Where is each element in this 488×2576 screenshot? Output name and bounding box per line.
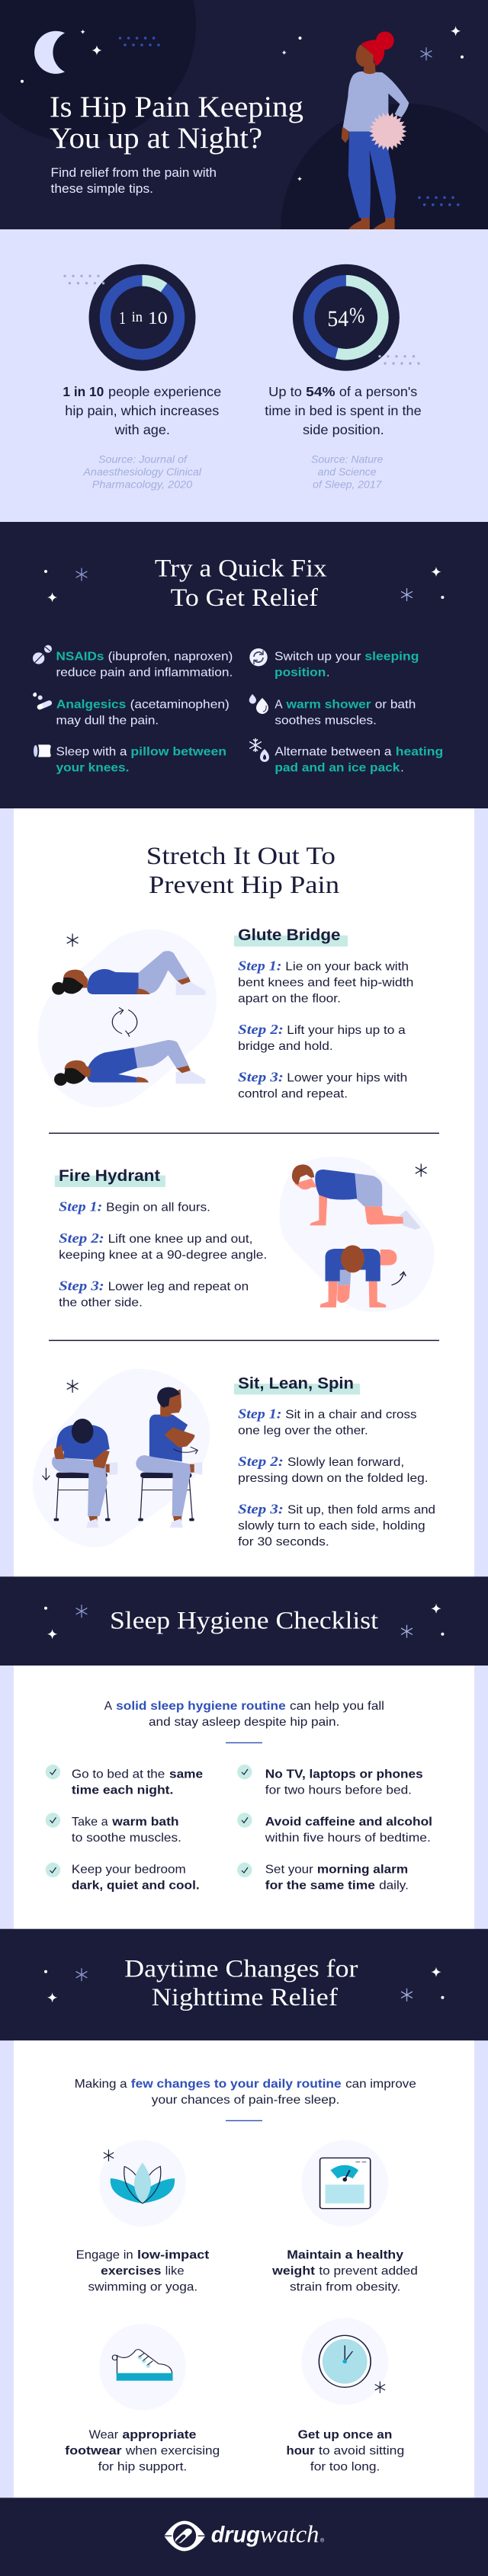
logo: wordmark: ® (320, 2538, 325, 2544)
item: sleep position: . (326, 667, 329, 680)
logo: wordmark: drug (211, 2523, 260, 2548)
item: warm shower (274, 698, 416, 727)
tip: footwear: footwear (65, 2445, 122, 2458)
text: 1 in 10 stat (63, 384, 221, 437)
illustration: sit lean spin (33, 1369, 210, 1547)
item: sleep position (274, 651, 419, 680)
panel: statistics (0, 229, 488, 522)
title: Is Hip Pain Keeping (50, 91, 303, 123)
panel: sleep hygiene checklist banner (0, 1576, 488, 1666)
tip: healthy weight: strain from obesity. (290, 2280, 400, 2293)
text: glute bridge: Lower your hips with (287, 1072, 407, 1085)
illustration: woman holding hip (342, 31, 409, 229)
tip: healthy weight: Maintain a healthy (287, 2248, 403, 2261)
text: glute bridge: bent knees and feet hip-width (238, 976, 413, 989)
figure: leaning forward (52, 1419, 117, 1528)
heading (146, 843, 339, 899)
text: 1 in 10 stat: hip pain, which increases (65, 403, 220, 418)
item: heat and ice: heating (396, 746, 443, 759)
item: pillow: pillow between (130, 746, 226, 759)
item: pillow: your knees. (56, 762, 129, 775)
tip: footwear: when exercising (125, 2445, 220, 2458)
icon: analgesic capsules (33, 693, 50, 707)
item: heat and ice: Alternate between a (274, 746, 392, 759)
item: heat and ice: . (400, 762, 404, 775)
icon: clock (302, 2318, 388, 2405)
icon: sleep switch (249, 648, 268, 666)
source: right (311, 453, 383, 491)
intro text: A (104, 1700, 112, 1713)
icon: NSAID pills (33, 645, 52, 664)
intro text: few changes to your daily routine (131, 2078, 342, 2091)
item: morning alarm (265, 1863, 409, 1892)
item: analgesics (56, 698, 230, 727)
chart: 54% donut: % (349, 303, 364, 328)
arrows: repeat (112, 1007, 137, 1037)
heading: Prevent Hip Pain (149, 872, 339, 899)
text: sit lean spin: pressing down on the folded leg. (238, 1472, 429, 1485)
arrow: down (43, 1468, 50, 1480)
heading highlight (55, 1176, 165, 1187)
item: same time (72, 1768, 203, 1797)
source: right: and Science (318, 466, 377, 478)
text: fire hydrant: the other side. (59, 1296, 143, 1309)
tip: low-impact exercise: low-impact (137, 2248, 210, 2261)
heading (155, 555, 327, 612)
chart: 1 in 10 donut: 1 (119, 309, 126, 328)
tip: low-impact exercise: exercises (101, 2264, 162, 2277)
item: morning alarm: morning alarm (317, 1863, 408, 1876)
text: fire hydrant: Step 2: (59, 1230, 104, 1246)
text: sit lean spin: Step 3: (238, 1502, 284, 1517)
tip: get up hourly: for too long. (310, 2461, 380, 2474)
text: glute bridge: Lie on your back with (285, 960, 409, 973)
icon: water drops (249, 694, 268, 714)
tip: footwear: for hip support. (98, 2461, 187, 2474)
subtitle: Find relief from the pain with (50, 165, 217, 180)
item: heat and ice (274, 746, 443, 775)
figure: spinning (136, 1387, 202, 1528)
source: left: Anaesthesiology Clinical (82, 466, 202, 478)
subtitle: these simple tips. (50, 181, 153, 196)
item: warm bath: to soothe muscles. (72, 1832, 181, 1845)
text: 54% stat: of a person's (339, 384, 418, 399)
icon: scale (302, 2140, 388, 2226)
text: sit lean spin (234, 1374, 435, 1548)
item: bedroom: dark, quiet and cool. (72, 1879, 200, 1892)
text: 54% stat: 54% (306, 384, 336, 399)
title: You up at Night? (50, 122, 262, 155)
dot pattern (63, 275, 104, 284)
item: caffeine: within five hours of bedtime. (265, 1832, 431, 1845)
intro text: and stay asleep despite hip pain. (149, 1716, 339, 1729)
source: right: Source: Nature (311, 453, 383, 465)
intro text (104, 1700, 384, 1729)
logo: wordmark: watch (260, 2520, 319, 2548)
text: 54% stat: side position. (303, 422, 384, 437)
intro text: solid sleep hygiene routine (116, 1700, 286, 1713)
text: glute bridge: control and repeat. (238, 1088, 348, 1101)
item: sleep position: Switch up your (274, 651, 361, 664)
item: no screens (265, 1768, 423, 1797)
subtitle (50, 165, 217, 196)
tip: low-impact exercise: like (165, 2264, 185, 2277)
text: 1 in 10 stat: 1 in 10 (63, 384, 104, 399)
item: warm shower: soothes muscles. (274, 714, 377, 727)
text: sit lean spin: slowly turn to each side, holding (238, 1520, 425, 1533)
heading: Stretch It Out To (146, 843, 336, 870)
panel: hero (0, 0, 488, 229)
panel: daytime tips (0, 2040, 488, 2498)
text: 1 in 10 stat: people experience (108, 384, 221, 399)
tip: low-impact exercise: swimming or yoga. (88, 2280, 197, 2293)
dot pattern (378, 355, 420, 365)
item: NSAIDs: (ibuprofen, naproxen) (108, 651, 233, 664)
illustration: fire hydrant (280, 1157, 434, 1312)
text: 54% stat (265, 384, 422, 437)
text: fire hydrant: Step 1: (59, 1198, 102, 1214)
tip: get up hourly: Get up once an (298, 2429, 392, 2442)
item: analgesics: (acetaminophen) (130, 698, 230, 711)
text: glute bridge: bridge and hold. (238, 1040, 333, 1053)
text: fire hydrant: Step 3: (59, 1278, 104, 1294)
panel: checklist (0, 1666, 488, 1929)
item: morning alarm: Set your (265, 1863, 313, 1876)
tip: low-impact exercise (76, 2248, 210, 2293)
night sky stars (21, 26, 464, 181)
text: glute bridge: Step 3: (238, 1070, 284, 1085)
text: glute bridge: apart on the floor. (238, 992, 341, 1005)
intro text: can help you fall (290, 1700, 384, 1713)
stars (44, 1604, 444, 1639)
heading: Sleep Hygiene Checklist (110, 1607, 378, 1634)
stars (44, 1967, 444, 2002)
source: left (82, 453, 202, 491)
item: bedroom: Keep your bedroom (72, 1863, 186, 1876)
item: morning alarm: for the same time (265, 1879, 375, 1892)
item: warm shower: or bath (375, 698, 416, 711)
illustration: glute bridge (38, 930, 217, 1107)
icon: shoe (99, 2324, 186, 2410)
chart: 54% donut (293, 264, 400, 371)
chart: 1 in 10 donut: 10 (148, 309, 168, 328)
item: same time: same (169, 1768, 203, 1781)
tip: get up hourly: hour (287, 2445, 315, 2458)
text: 54% stat: time in bed is spent in the (265, 403, 422, 418)
icon: snowflake and flame (249, 738, 269, 762)
item: bedroom (72, 1863, 200, 1892)
text: sit lean spin: Sit, Lean, Spin (238, 1374, 354, 1392)
pain burst (369, 112, 406, 151)
item: analgesics: Analgesics (56, 698, 126, 711)
check icons (46, 1765, 252, 1877)
chart: 1 in 10 donut: in (132, 309, 143, 325)
chart: 1 in 10 donut (88, 264, 195, 371)
item: no screens: for two hours before bed. (265, 1784, 412, 1797)
tip: healthy weight: weight (271, 2264, 316, 2277)
tip: footwear: Wear (89, 2429, 119, 2442)
tip: healthy weight (271, 2248, 418, 2293)
item: warm bath: Take a (72, 1816, 108, 1829)
stars (44, 567, 444, 602)
text: sit lean spin: Step 2: (238, 1454, 284, 1469)
text: 1 in 10 stat: with age. (114, 422, 170, 437)
text: glute bridge: Lift your hips up to a (287, 1024, 406, 1037)
item: pillow (56, 746, 226, 775)
item: caffeine (265, 1816, 432, 1845)
item: pillow: Sleep with a (56, 746, 127, 759)
item: no screens: No TV, laptops or phones (265, 1768, 423, 1781)
arrow: twist (173, 1447, 197, 1454)
text: sit lean spin: Step 1: (238, 1406, 281, 1421)
intro text: your chances of pain-free sleep. (152, 2094, 339, 2107)
panel: stretches (0, 808, 488, 1577)
item: warm shower: A (274, 698, 283, 711)
dot pattern (119, 37, 460, 206)
text: fire hydrant: Lift one knee up and out, (108, 1233, 252, 1246)
item: sleep position: sleeping (364, 651, 419, 664)
source: left: Pharmacology, 2020 (92, 479, 193, 491)
text: glute bridge: Step 2: (238, 1022, 284, 1037)
text: sit lean spin: Sit in a chair and cross (285, 1408, 416, 1421)
panel: daytime changes banner (0, 1929, 488, 2040)
text: fire hydrant (55, 1166, 267, 1309)
text: fire hydrant: keeping knee at a 90-degree angle. (59, 1249, 267, 1262)
text: sit lean spin: Sit up, then fold arms and (287, 1504, 435, 1517)
chart: 54% donut: 54 (327, 306, 348, 331)
heading highlight (234, 936, 348, 946)
item: warm shower: warm shower (285, 698, 371, 711)
source: left: Source: Journal of (98, 453, 188, 465)
heading: Daytime Changes for (124, 1955, 358, 1982)
text: 54% stat: Up to (268, 384, 302, 399)
heading: To Get Relief (171, 584, 318, 612)
tip: get up hourly (287, 2429, 404, 2474)
item: NSAIDs: NSAIDs (56, 651, 104, 664)
item: morning alarm: daily. (379, 1879, 409, 1892)
text: fire hydrant: Lower leg and repeat on (108, 1281, 249, 1294)
logo: eye and pill (164, 2521, 205, 2551)
text: glute bridge (234, 926, 413, 1101)
item: NSAIDs (56, 651, 233, 680)
item: same time: Go to bed at the (72, 1768, 165, 1781)
item: same time: time each night. (72, 1784, 173, 1797)
logo: wordmark (211, 2520, 325, 2548)
tip: get up hourly: to avoid sitting (319, 2445, 404, 2458)
text: sit lean spin: for 30 seconds. (238, 1535, 329, 1548)
icon: moon (34, 31, 65, 74)
title (50, 91, 303, 155)
panel: quick fix (0, 522, 488, 808)
panel: footer (0, 2498, 488, 2576)
arrow: knee lift (391, 1272, 406, 1285)
heading: Nighttime Relief (152, 1984, 338, 2011)
text: sit lean spin: one leg over the other. (238, 1424, 368, 1437)
tip: healthy weight: to prevent added (319, 2264, 418, 2277)
tip: footwear (65, 2429, 220, 2474)
item: warm bath (72, 1816, 181, 1845)
figure: on all fours (292, 1164, 421, 1230)
heading: Try a Quick Fix (155, 555, 327, 583)
item: NSAIDs: reduce pain and inflammation. (56, 667, 233, 680)
heading (124, 1955, 358, 2011)
figure: lying down (52, 951, 205, 995)
text: sit lean spin: Slowly lean forward, (287, 1456, 404, 1469)
text: fire hydrant: Begin on all fours. (106, 1201, 210, 1214)
item: sleep position: position (274, 667, 326, 680)
intro text: can improve (345, 2078, 416, 2091)
tip: footwear: appropriate (122, 2429, 197, 2442)
text: glute bridge: Step 1: (238, 958, 281, 973)
item: heat and ice: pad and an ice pack (274, 762, 400, 775)
source: right: of Sleep, 2017 (313, 479, 382, 491)
intro text: Making a (75, 2078, 127, 2091)
item: warm bath: warm bath (111, 1816, 179, 1829)
tip: low-impact exercise: Engage in (76, 2248, 133, 2261)
intro text (75, 2078, 416, 2107)
heading highlight (234, 1384, 360, 1394)
icon: pillow (34, 744, 51, 757)
text: glute bridge: Glute Bridge (238, 926, 341, 944)
item: analgesics: may dull the pain. (56, 714, 159, 727)
text: fire hydrant: Fire Hydrant (59, 1166, 160, 1185)
icon: lotus (99, 2140, 186, 2226)
figure: bridge (54, 1040, 205, 1086)
item: caffeine: Avoid caffeine and alcohol (265, 1816, 432, 1829)
figure: lifting knee (320, 1245, 396, 1307)
